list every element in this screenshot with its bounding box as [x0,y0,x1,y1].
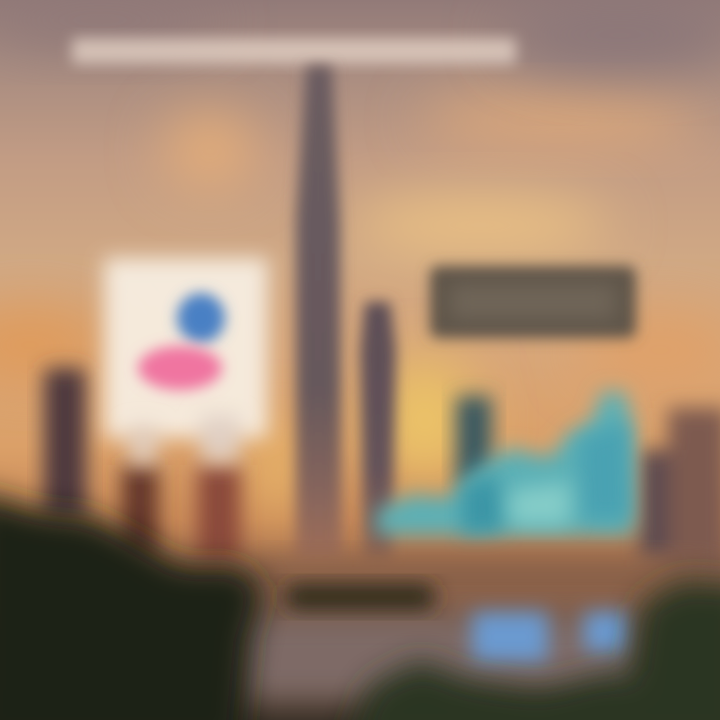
card columns [128,415,240,465]
pink ellipse [138,346,222,390]
dark text panel [430,266,636,338]
second tower [360,302,396,560]
left tower [44,368,86,518]
lower left towers [122,465,240,560]
ground haze [240,560,720,700]
right trees [345,580,720,720]
dark hedge [285,584,435,610]
right buildings [640,408,720,583]
left trees [0,490,265,720]
central tower [296,66,342,560]
white card with pie chart [104,258,268,465]
teal area chart [376,392,634,535]
low building windows [472,612,628,662]
blue circle [177,293,225,343]
title bar [72,38,516,64]
